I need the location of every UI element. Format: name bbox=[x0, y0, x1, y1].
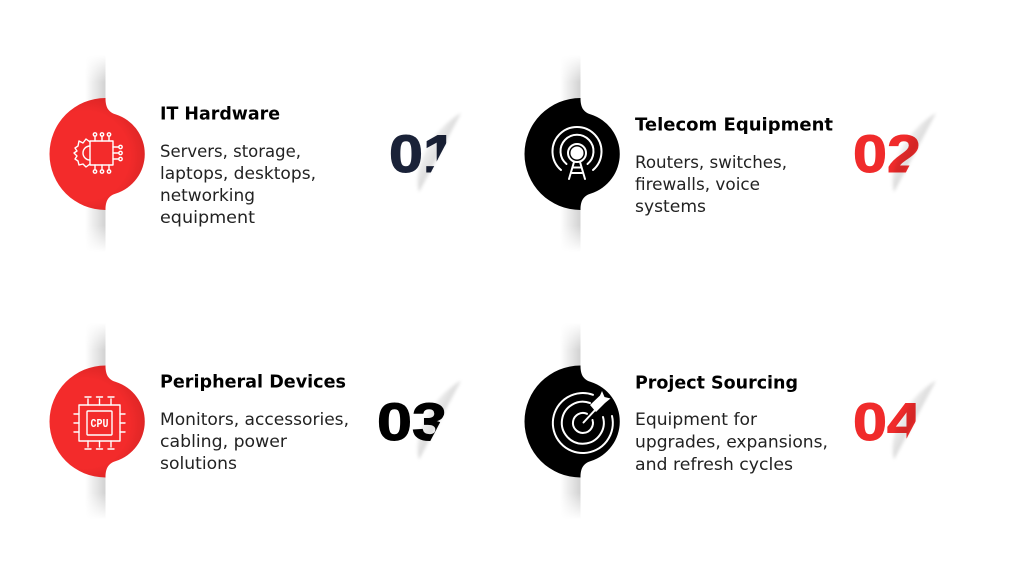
description: solutions bbox=[160, 454, 237, 473]
heading: Peripheral Devices bbox=[160, 372, 346, 392]
description bbox=[160, 410, 349, 473]
description: and refresh cycles bbox=[635, 455, 793, 474]
number 01 bbox=[389, 113, 461, 192]
description: upgrades, expansions, bbox=[635, 432, 828, 452]
shadow strips bbox=[560, 322, 580, 520]
shadow strips bbox=[560, 55, 580, 252]
heading: Project Sourcing bbox=[635, 372, 798, 394]
shadow strips bbox=[85, 322, 106, 520]
icon: target with arrow bbox=[553, 391, 613, 453]
number 02 bbox=[853, 113, 936, 192]
number 04 bbox=[853, 380, 936, 460]
number 04: 04 bbox=[853, 393, 922, 452]
number 01: 01 bbox=[389, 125, 457, 184]
icon badge: red bbox=[50, 366, 145, 478]
number 03 bbox=[377, 380, 461, 460]
icon badge: red bbox=[50, 98, 145, 210]
description bbox=[635, 410, 828, 474]
description: Servers, storage, bbox=[160, 142, 301, 161]
description: firewalls, voice bbox=[635, 175, 760, 194]
heading: Telecom Equipment bbox=[635, 114, 833, 136]
description bbox=[160, 142, 316, 227]
description: Equipment for bbox=[635, 410, 757, 429]
description: systems bbox=[635, 197, 706, 216]
icon: CPU chip bbox=[74, 397, 125, 449]
icon badge: black bbox=[524, 366, 620, 478]
shadow strips bbox=[85, 55, 106, 252]
icon: antenna bbox=[552, 127, 602, 179]
number 03: 03 bbox=[377, 393, 447, 452]
description: equipment bbox=[160, 208, 256, 227]
heading: IT Hardware bbox=[160, 104, 280, 124]
panel: Telecom Equipment bbox=[524, 55, 936, 252]
panel: Project Sourcing bbox=[524, 322, 936, 520]
description bbox=[635, 153, 787, 216]
description: Monitors, accessories, bbox=[160, 410, 349, 429]
panel: Peripheral Devices bbox=[50, 322, 461, 520]
icon: chip with gear bbox=[74, 133, 122, 173]
icon: CPU chip: CPU bbox=[90, 417, 108, 431]
description: networking bbox=[160, 186, 255, 205]
description: cabling, power bbox=[160, 432, 287, 451]
description: Routers, switches, bbox=[635, 153, 787, 172]
description: laptops, desktops, bbox=[160, 164, 316, 183]
panel: IT Hardware bbox=[50, 55, 461, 252]
number 02: 02 bbox=[853, 125, 921, 184]
icon badge: black bbox=[524, 98, 620, 210]
